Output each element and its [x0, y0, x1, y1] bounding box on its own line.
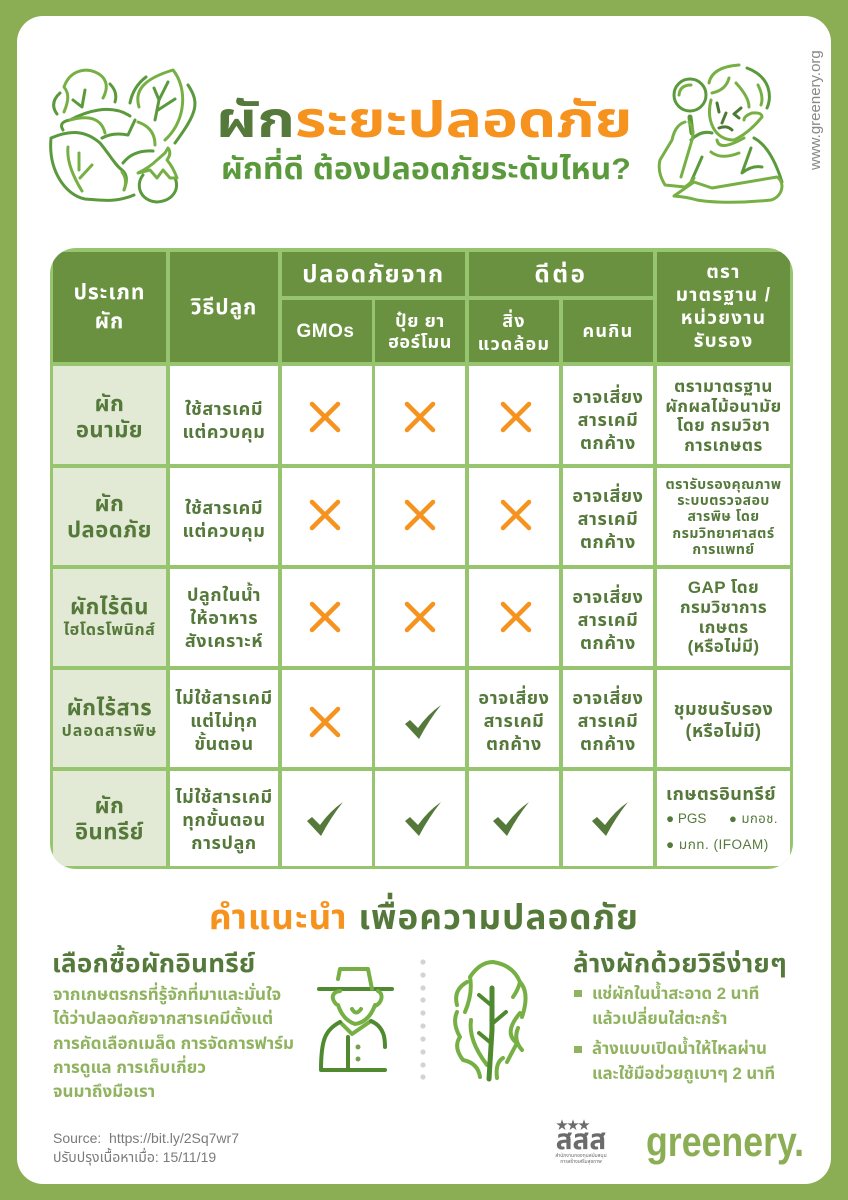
row 4 method: ไม่ใช้สารเคมี — [175, 688, 273, 708]
left advice text: จากเกษตรกรที่รู้จักที่มาและมั่นใจ — [53, 985, 281, 1004]
row 1 name: ผัก — [95, 390, 124, 416]
row 4 environment risk: อาจเสี่ยง — [478, 688, 550, 708]
row 5 certification — [657, 771, 790, 866]
organic standards: เกษตรอินทรีย์ — [666, 784, 776, 804]
left advice text: การคัดเลือกเมล็ด การจัดการฟาร์ม — [53, 1034, 294, 1053]
row 3 consumer risk: ตกค้าง — [580, 633, 636, 653]
row 3 method: สังเคราะห์ — [185, 631, 263, 651]
row 1 certification: โดย กรมวิชา — [677, 416, 770, 435]
row 4 fertilizer check — [375, 670, 465, 767]
row 2 method: แต่ควบคุม — [183, 520, 265, 540]
row 2 fertilizer cross — [375, 468, 465, 565]
header: consumers: คนกิน — [583, 320, 633, 340]
row 4 method: ขั้นตอน — [194, 734, 254, 754]
header: GMOs: GMOs — [297, 320, 354, 342]
header: safe from: ปลอดภัยจาก — [302, 260, 445, 288]
row 5 method — [170, 771, 278, 866]
row 3 consumer risk: สารเคมี — [578, 610, 638, 630]
row 4 method: แต่ไม่ทุก — [190, 711, 258, 731]
logo: ThaiHealth: สำนักงานกองทุนสนับสนุน — [555, 1153, 607, 1159]
logo: ThaiHealth: การสร้างเสริมสุขภาพ — [560, 1159, 602, 1165]
advice heading: คำแนะนำ เพื่อความปลอดภัย — [209, 898, 639, 937]
row 4 environment risk: สารเคมี — [484, 711, 544, 731]
row 4 certification — [657, 670, 790, 767]
row 1 method: ใช้สารเคมี — [185, 399, 263, 419]
row 1 consumer risk: อาจเสี่ยง — [572, 386, 644, 406]
row 3 method — [170, 569, 278, 666]
row 4 environment risk — [469, 670, 559, 767]
header: certification — [657, 252, 790, 362]
row 1 certification: ตรามาตรฐาน — [674, 377, 773, 396]
header: fertilizer: ปุ๋ย ยา — [395, 311, 445, 331]
row 4 name — [53, 670, 166, 767]
row 2 GMO cross — [282, 468, 372, 565]
row 2 consumer risk: อาจเสี่ยง — [572, 486, 644, 506]
row 3 name: ผักไร้ดิน — [70, 594, 149, 618]
row 1 name — [53, 366, 166, 464]
icon: farmer — [317, 967, 394, 1072]
row 2 environment cross — [469, 468, 559, 565]
row 5 method: ไม่ใช้สารเคมี — [175, 786, 273, 806]
source note: Source: https://bit.ly/2Sq7wr7 — [53, 1130, 239, 1146]
row 4 consumer risk — [563, 670, 653, 767]
row 1 certification: การเกษตร — [684, 436, 763, 454]
row 1 method — [170, 366, 278, 464]
row 2 certification: ตรารับรองคุณภาพ — [665, 476, 782, 492]
header: good for: ดีต่อ — [535, 260, 587, 288]
row 3 certification: กรมวิชาการ — [680, 598, 767, 617]
header: good for — [469, 252, 653, 296]
row 1 consumer risk: ตกค้าง — [580, 432, 636, 452]
row 2 certification: สารพิษ โดย — [687, 508, 760, 524]
header: GMOs — [282, 300, 372, 362]
subtitle: ผักที่ดี ต้องปลอดภัยระดับไหน? — [221, 153, 631, 186]
row 5 environment check — [469, 771, 559, 866]
row 3 consumer risk: อาจเสี่ยง — [572, 587, 644, 607]
header: environment — [469, 300, 559, 362]
organic standards: ● มกท. (IFOAM) — [666, 837, 769, 852]
row 3 name: ไฮโดรโพนิกส์ — [64, 622, 155, 638]
logo: greenery: greenery. — [646, 1118, 804, 1165]
header: certification: หน่วยงาน — [681, 308, 766, 329]
row 2 consumer risk — [563, 468, 653, 565]
row 5 name — [53, 771, 166, 866]
icon: vegetables — [49, 68, 196, 204]
row 3 GMO cross — [282, 569, 372, 666]
row 5 name: อินทรีย์ — [75, 818, 144, 844]
row 5 name: ผัก — [95, 792, 124, 818]
row 5 consumer check — [563, 771, 653, 866]
left advice text: การดูแล การเก็บเกี่ยว — [53, 1058, 206, 1077]
row 5 method: ทุกขั้นตอน — [182, 810, 266, 830]
header: fertilizer — [375, 300, 465, 362]
header: vegetable type: ประเภท — [74, 281, 145, 304]
organic standards — [666, 784, 778, 852]
header: safe from — [282, 252, 465, 296]
row 3 method: ปลูกในน้ำ — [187, 585, 261, 605]
row 1 fertilizer cross — [375, 366, 465, 464]
row 4 method — [170, 670, 278, 767]
icon: person with magnifying glass — [658, 64, 784, 204]
logo: ThaiHealth — [555, 1118, 607, 1165]
organic standards: ● มกอช. — [729, 811, 778, 826]
row 4 environment risk: ตกค้าง — [486, 734, 542, 754]
header: consumers — [563, 300, 653, 362]
left advice text: จนมาถึงมือเรา — [53, 1082, 155, 1101]
right advice bullet 1 — [574, 982, 759, 1028]
row 3 certification: GAP โดย — [688, 578, 759, 597]
source note: ปรับปรุงเนื้อหาเมื่อ: 15/11/19 — [53, 1148, 216, 1164]
logo: ThaiHealth: ★★★ — [556, 1118, 589, 1132]
right advice heading: ล้างผักด้วยวิธีง่ายๆ — [573, 948, 787, 978]
row 4 consumer risk: สารเคมี — [578, 711, 638, 731]
row 2 consumer risk: สารเคมี — [578, 509, 638, 529]
row 5 GMO check — [282, 771, 372, 866]
row 2 consumer risk: ตกค้าง — [580, 532, 636, 552]
row 2 method — [170, 468, 278, 565]
row 1 consumer risk: สารเคมี — [578, 410, 638, 430]
row 4 certification: ชุมชนรับรอง — [674, 698, 773, 718]
row 1 certification — [657, 366, 790, 464]
row 3 name — [53, 569, 166, 666]
header: vegetable type: ผัก — [95, 310, 124, 333]
row 4 consumer risk: ตกค้าง — [580, 734, 636, 754]
comparison table — [50, 248, 793, 869]
title: ผักระยะปลอดภัย — [216, 92, 632, 148]
left advice text: ได้ว่าปลอดภัยจากสารเคมีตั้งแต่ — [53, 1009, 273, 1028]
row 3 environment cross — [469, 569, 559, 666]
row 1 certification: ผักผลไม้อนามัย — [665, 396, 782, 416]
header: certification: มาตรฐาน / — [676, 285, 771, 306]
row 5 method: การปลูก — [191, 832, 257, 852]
header: fertilizer: ฮอร์โมน — [388, 332, 452, 352]
row 4 certification: (หรือไม่มี) — [686, 720, 761, 740]
logo: ThaiHealth: สสส — [556, 1124, 606, 1155]
row 4 GMO cross — [282, 670, 372, 767]
header: environment: สิ่ง — [502, 310, 526, 330]
right advice bullet 2: ล้างแบบเปิดน้ำให้ไหลผ่าน — [592, 1039, 767, 1058]
right advice bullet 1: แล้วเปลี่ยนใส่ตะกร้า — [592, 1009, 727, 1028]
row 3 certification: (หรือไม่มี) — [688, 637, 759, 656]
website label: www.greenery.org — [807, 50, 824, 170]
row 2 certification: ระบบตรวจสอบ — [677, 492, 770, 508]
left advice text — [53, 982, 294, 1101]
dotted divider — [420, 960, 426, 1080]
row 4 name: ปลอดสารพิษ — [62, 722, 157, 740]
row 2 certification — [657, 468, 790, 565]
row 2 name — [53, 468, 166, 565]
row 2 certification: กรมวิทยาศาสตร์ — [672, 525, 775, 541]
row 4 consumer risk: อาจเสี่ยง — [572, 688, 644, 708]
row 1 GMO cross — [282, 366, 372, 464]
header: growing method: วิธีปลูก — [191, 296, 257, 318]
row 1 environment cross — [469, 366, 559, 464]
left advice heading: เลือกซื้อผักอินทรีย์ — [52, 948, 256, 978]
row 2 method: ใช้สารเคมี — [185, 498, 263, 518]
right advice bullet 2 — [574, 1036, 775, 1084]
header: environment: แวดล้อม — [478, 334, 550, 354]
header: vegetable type — [53, 252, 166, 362]
row 3 method: ให้อาหาร — [190, 608, 258, 628]
header: growing method — [170, 252, 278, 362]
row 2 name: ผัก — [95, 490, 124, 516]
row 5 fertilizer check — [375, 771, 465, 866]
row 3 consumer risk — [563, 569, 653, 666]
row 1 name: อนามัย — [76, 416, 143, 442]
row 2 certification: การแพทย์ — [692, 541, 755, 557]
row 3 certification — [657, 569, 790, 666]
row 4 name: ผักไร้สาร — [67, 694, 152, 720]
right advice bullet 1: แช่ผักในน้ำสะอาด 2 นาที — [592, 984, 759, 1003]
row 3 fertilizer cross — [375, 569, 465, 666]
header: certification: ตรา — [706, 262, 741, 283]
icon: lettuce — [453, 960, 528, 1082]
row 1 method: แต่ควบคุม — [183, 422, 265, 442]
organic standards: ● PGS — [666, 811, 706, 826]
right advice bullet 2: และใช้มือช่วยถูเบาๆ 2 นาที — [592, 1064, 775, 1082]
header: certification: รับรอง — [694, 331, 753, 352]
row 2 name: ปลอดภัย — [67, 516, 152, 542]
row 3 certification: เกษตร — [699, 618, 748, 636]
row 1 consumer risk — [563, 366, 653, 464]
source note — [53, 1130, 239, 1166]
